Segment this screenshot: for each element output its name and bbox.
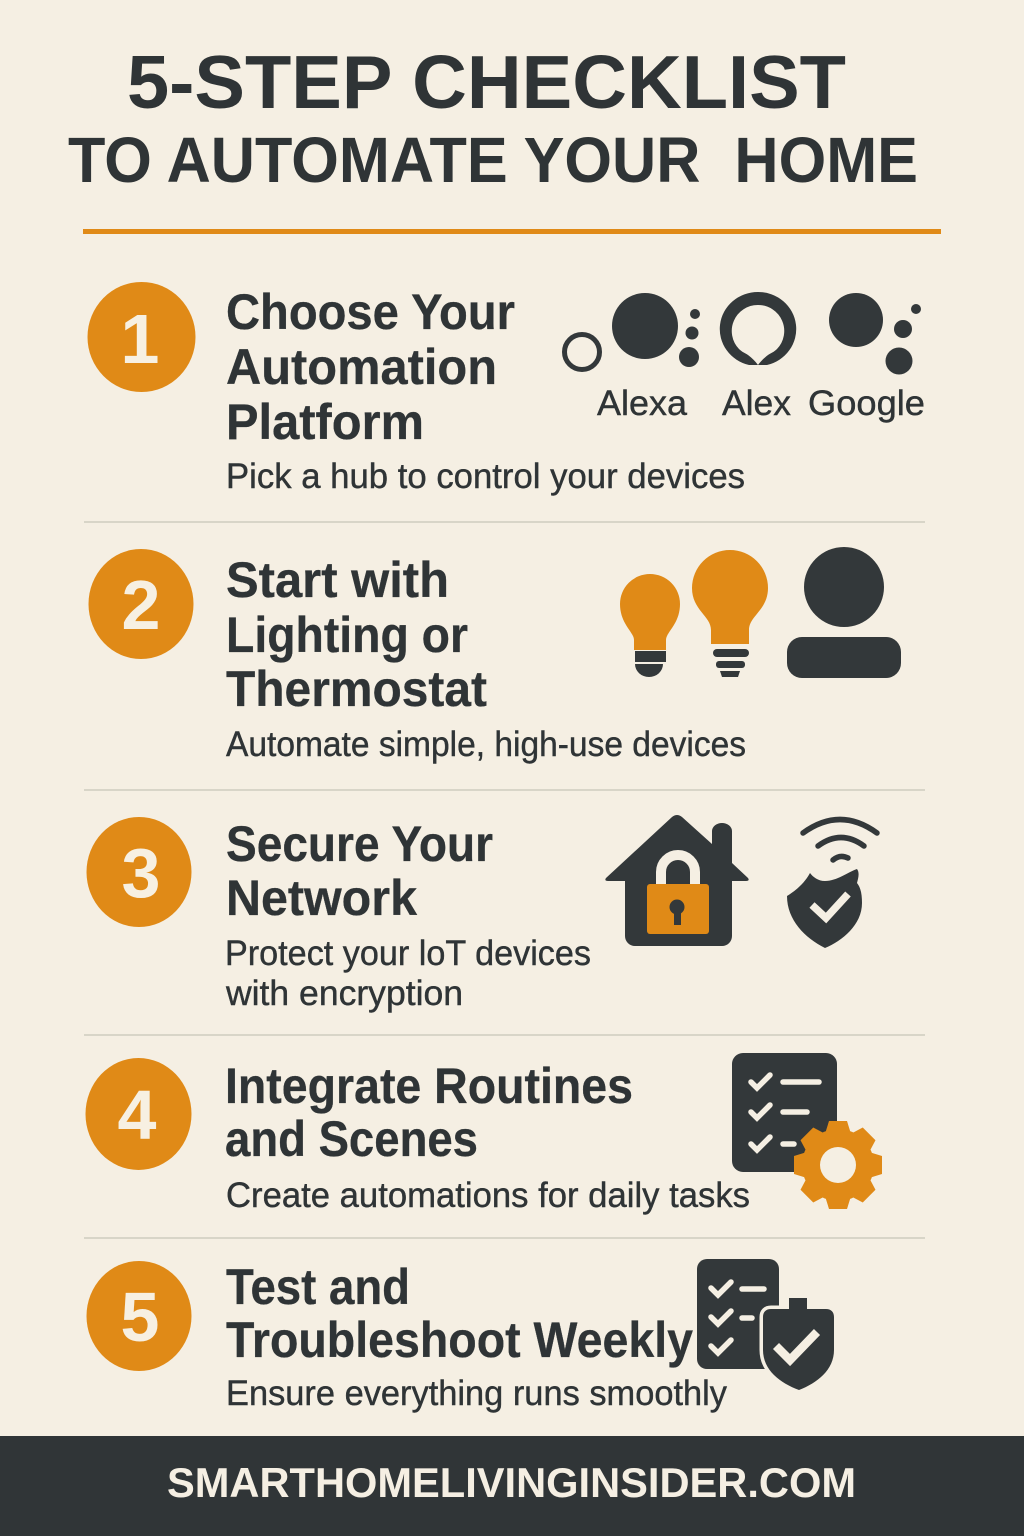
title: 5-STEP CHECKLIST [127,40,846,124]
number badge 4 [86,1058,192,1170]
step 2 description: Automate simple, high-use devices [226,725,746,764]
icon: Google dots [829,293,921,374]
panel: step 4 [86,1053,882,1215]
icon: house with padlock [605,815,749,946]
step 4 heading [225,1058,633,1167]
step 3 description [225,934,591,1013]
step 3 heading: Network [226,870,417,926]
number badge 1 [88,282,196,392]
step 5 heading: Test and [226,1259,410,1315]
step 2 heading [226,552,487,717]
panel: step 3 [86,815,877,1013]
step 3 heading [226,816,493,926]
panel: step 5 [86,1259,834,1413]
step 4 heading: Integrate Routines [225,1058,633,1114]
icon: large light bulb [692,550,768,677]
number badge 5 [86,1261,192,1371]
step 5 description: Ensure everything runs smoothly [226,1374,727,1413]
icon: small light bulb [620,574,680,677]
icon: wifi shield [787,820,877,948]
step 5 heading [226,1259,693,1368]
step 2 heading: Thermostat [226,661,487,717]
number badge 3 [86,817,192,927]
platform labels [597,384,925,423]
number badge 2 [88,549,194,659]
number badge 4: 4 [118,1076,157,1154]
title [68,40,918,196]
icon: checklist with gear [732,1053,882,1209]
icon: Alex ring [720,292,796,365]
step 2 heading: Start with [226,552,449,608]
step 5 heading: Troubleshoot Weekly [226,1312,693,1368]
panel: step 2 [88,547,901,764]
step 1 heading: Choose Your [226,284,515,340]
step 3 description: with encryption [225,974,463,1013]
step 1 description: Pick a hub to control your devices [226,457,745,496]
platform labels: Google [808,384,925,423]
title: TO AUTOMATE YOUR HOME [68,124,918,196]
step 3 description: Protect your loT devices [225,934,591,973]
step 3 heading: Secure Your [226,816,493,872]
gear [794,1121,882,1209]
footer banner [0,1436,1024,1536]
step 1 heading [226,284,515,450]
icon: person [787,547,901,678]
icon: Alexa dots [564,293,700,370]
platform labels: Alex [722,384,791,423]
step 1 heading: Automation [226,339,497,395]
number badge 1: 1 [121,300,159,378]
number badge 2: 2 [122,566,160,644]
panel: step 1 [88,282,925,496]
number badge 5: 5 [121,1278,159,1356]
step 2 heading: Lighting or [226,607,468,663]
step 1 heading: Platform [226,394,424,450]
step 4 description: Create automations for daily tasks [226,1176,750,1215]
step 4 heading: and Scenes [225,1111,478,1167]
footer banner: SMARTHOMELIVINGINSIDER.COM [167,1459,856,1506]
number badge 3: 3 [122,834,160,912]
icon: checklist with shield [697,1259,834,1390]
platform labels: Alexa [597,384,688,423]
